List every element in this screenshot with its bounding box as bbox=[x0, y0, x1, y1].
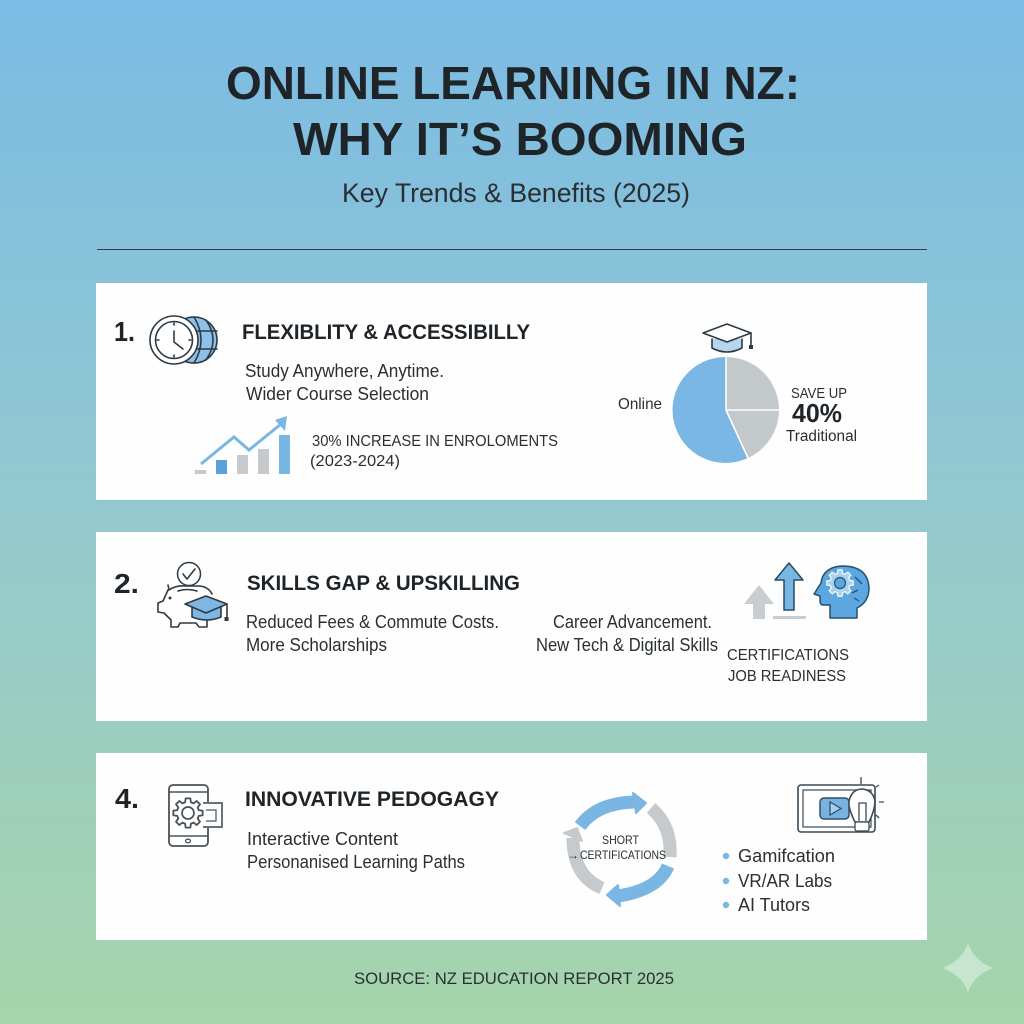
icon: piggy bank with cap bbox=[158, 562, 228, 627]
cycle label: SHORT bbox=[602, 833, 640, 847]
bullet list bbox=[723, 846, 835, 915]
title: ONLINE LEARNING IN NZ: bbox=[226, 57, 800, 109]
bullet list: VR/AR Labs bbox=[738, 871, 832, 891]
savings callout: 40% bbox=[792, 398, 842, 428]
icon: clock and globe bbox=[150, 316, 217, 364]
certification labels bbox=[727, 647, 849, 685]
text block: career: Career Advancement. bbox=[553, 612, 712, 632]
number 2: 2. bbox=[114, 568, 139, 599]
text block: costs: Reduced Fees & Commute Costs. bbox=[246, 612, 499, 632]
icon: phone with gear bbox=[169, 785, 222, 846]
certification labels: CERTIFICATIONS bbox=[727, 647, 849, 664]
heading: FLEXIBLITY & ACCESSIBILLY bbox=[242, 321, 530, 344]
bullet list: AI Tutors bbox=[738, 895, 810, 915]
icon: video screen with lightbulb bbox=[798, 777, 884, 832]
text block: career bbox=[536, 612, 718, 655]
cycle label: CERTIFICATIONS bbox=[580, 848, 666, 862]
savings callout: Traditional bbox=[786, 428, 857, 445]
pie chart bbox=[673, 357, 779, 463]
panel 1: flexibility and accessibility bbox=[96, 283, 927, 500]
savings callout bbox=[786, 385, 857, 445]
heading: SKILLS GAP & UPSKILLING bbox=[247, 572, 520, 595]
enrolment stat bbox=[310, 433, 558, 470]
panel 2: skills gap and upskilling bbox=[96, 532, 927, 721]
text block: Personanised Learning Paths bbox=[247, 852, 465, 872]
text block: Study Anywhere, Anytime. bbox=[245, 361, 444, 381]
icon: graduation cap bbox=[703, 324, 753, 352]
title: WHY IT’S BOOMING bbox=[293, 113, 747, 165]
text block: costs: More Scholarships bbox=[246, 635, 387, 655]
panel 3: innovative pedagogy bbox=[96, 753, 927, 940]
heading: INNOVATIVE PEDOGAGY bbox=[245, 788, 499, 811]
text block: career: New Tech & Digital Skills bbox=[536, 635, 718, 655]
enrolment stat: 30% INCREASE IN ENROLOMENTS bbox=[312, 433, 558, 450]
icon: sparkle bbox=[942, 943, 993, 992]
number 1: 1. bbox=[114, 316, 135, 347]
certification labels: JOB READINESS bbox=[728, 668, 846, 685]
text block: Wider Course Selection bbox=[246, 384, 429, 404]
cycle diagram bbox=[564, 793, 670, 906]
enrolment stat: (2023-2024) bbox=[310, 453, 400, 470]
bullet list: Gamifcation bbox=[738, 846, 835, 866]
text block bbox=[245, 361, 444, 404]
text block: costs bbox=[246, 612, 499, 655]
savings callout: SAVE UP bbox=[791, 385, 847, 402]
cycle label: → bbox=[567, 848, 579, 862]
text block: Interactive Content bbox=[247, 829, 398, 849]
icon: head with gear bbox=[814, 566, 869, 618]
subtitle: Key Trends & Benefits (2025) bbox=[342, 178, 690, 208]
cycle label bbox=[567, 833, 666, 862]
source line: SOURCE: NZ EDUCATION REPORT 2025 bbox=[354, 969, 674, 988]
title bbox=[226, 57, 800, 165]
text block bbox=[247, 829, 465, 872]
icon: upward arrows bbox=[744, 563, 806, 619]
pie label: online: Online bbox=[618, 396, 662, 413]
chart: enrolment growth bars bbox=[195, 416, 290, 474]
number 4: 4. bbox=[115, 783, 139, 814]
